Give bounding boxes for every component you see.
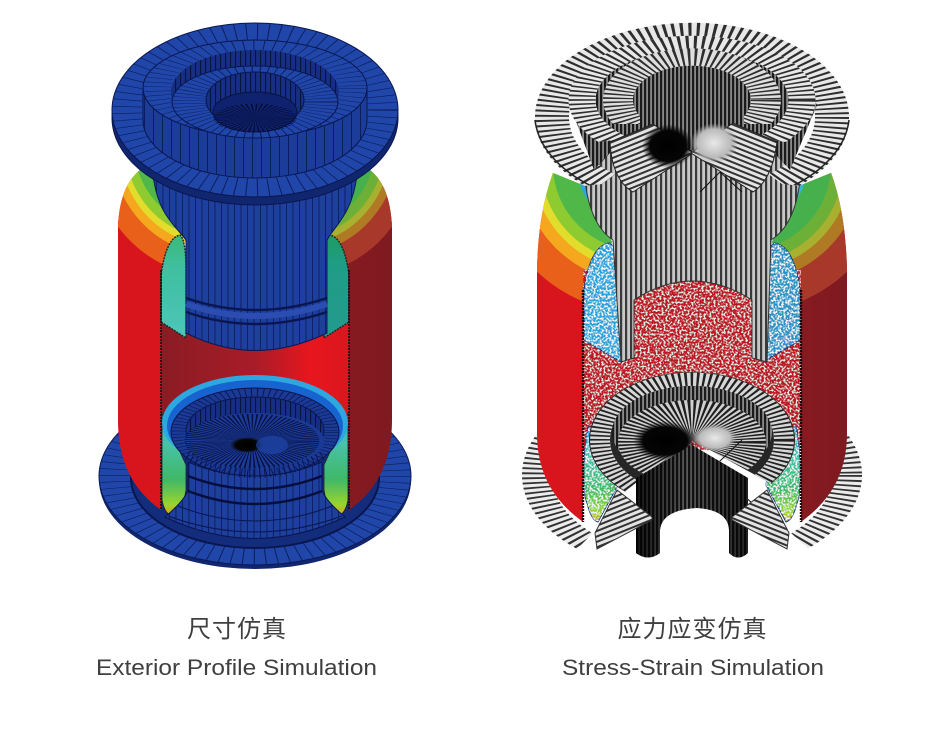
lower left fan section xyxy=(595,490,652,549)
left body strip with contour bands xyxy=(537,173,612,522)
left body strip with contour bands xyxy=(118,170,186,510)
black hollow column below boss xyxy=(636,445,748,558)
lower right speckled lobe xyxy=(764,427,802,523)
right front fan wedge xyxy=(691,123,777,192)
dark inner wall behind top rings xyxy=(570,38,817,170)
caption: right Chinese title: 应力应变仿真 xyxy=(618,616,768,643)
infographic canvas xyxy=(98,22,862,675)
right body strip with contour bands xyxy=(772,173,847,522)
central recess wall xyxy=(640,72,744,150)
central dark and light swirl xyxy=(642,123,742,192)
blue contour ring around lower boss xyxy=(162,375,348,472)
lower boss radial floor xyxy=(186,413,324,473)
central blue column xyxy=(153,175,357,350)
lower right inner lobe xyxy=(324,413,348,515)
lower boss ring xyxy=(171,388,339,476)
panel: exterior profile simulation model xyxy=(90,5,420,569)
right body strip with contour bands xyxy=(330,170,392,510)
window edge lines xyxy=(583,290,801,522)
central striped column with legs xyxy=(585,150,800,362)
upper right inner lobe xyxy=(324,235,349,338)
speckled back wall xyxy=(583,270,801,450)
back wall seen through the window xyxy=(161,270,349,445)
lower left speckled lobe xyxy=(582,427,620,523)
third tier cut ring xyxy=(618,57,766,143)
caption: right English title: Stress-Strain Simulation xyxy=(562,655,824,680)
lower boss cut ring xyxy=(589,372,795,492)
bottom flange xyxy=(99,387,411,569)
lower left inner lobe xyxy=(162,413,186,515)
top flange cut ring xyxy=(535,33,849,201)
upper left speckled lobe xyxy=(584,243,622,363)
second tier cut ring xyxy=(582,43,802,157)
left front fan wedge xyxy=(610,124,693,192)
caption: left Chinese title: 尺寸仿真 xyxy=(187,616,287,643)
lower neck and cone xyxy=(165,462,345,538)
top flange xyxy=(112,23,398,205)
bottom flange cut sections xyxy=(522,434,862,548)
lower boss centre swirl xyxy=(633,421,760,510)
panel: stress-strain simulation model xyxy=(522,22,862,558)
second tier of top boss xyxy=(143,40,367,178)
recess of top boss xyxy=(171,50,339,138)
upper left inner lobe xyxy=(161,235,186,338)
caption: left English title: Exterior Profile Simulation xyxy=(96,655,377,680)
lower right fan section xyxy=(732,490,789,549)
upper right speckled lobe xyxy=(762,243,800,363)
window edge lines xyxy=(161,270,349,510)
